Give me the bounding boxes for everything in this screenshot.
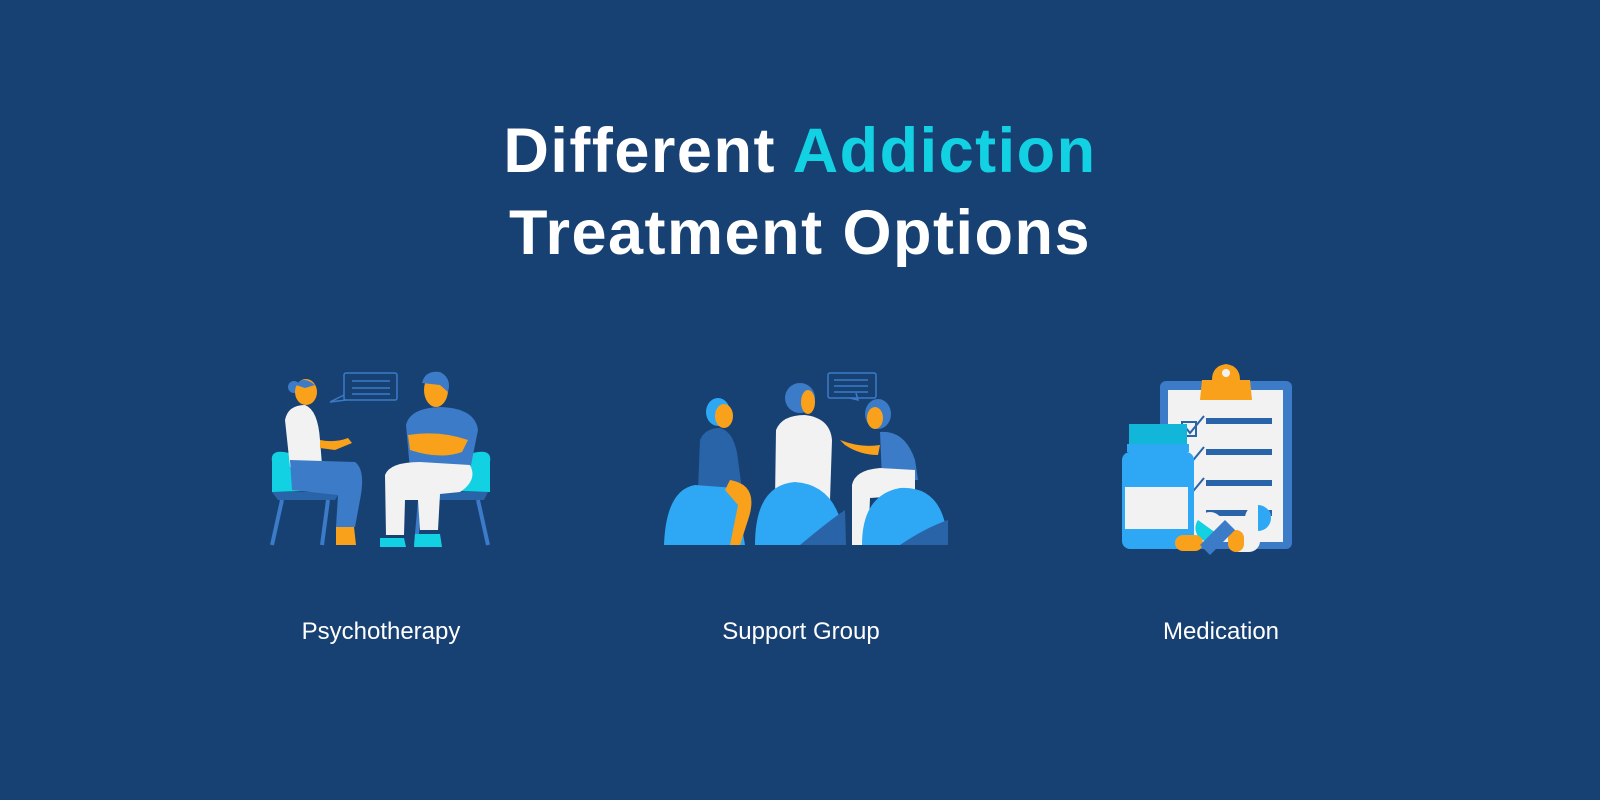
chair left [272,452,340,492]
title: Different Addiction [503,116,1097,186]
bottle [1129,424,1187,444]
woman left [706,398,730,426]
man [424,373,448,407]
pills [1197,512,1223,538]
label: support group: Support Group [722,618,880,645]
illustration: psychotherapy [272,372,490,547]
man middle [785,383,815,413]
speech bubble [330,373,397,402]
chair right [420,452,490,492]
checklist [1206,418,1272,516]
title [503,116,1097,268]
title: Treatment Options [509,198,1091,268]
clipboard [1160,381,1292,549]
illustration: medication [1122,364,1292,555]
label: psychotherapy: Psychotherapy [302,618,460,645]
label: medication: Medication [1163,618,1279,645]
illustration: support group [664,373,948,545]
speech bubble [828,373,876,400]
woman right [865,399,891,429]
woman [288,381,300,393]
